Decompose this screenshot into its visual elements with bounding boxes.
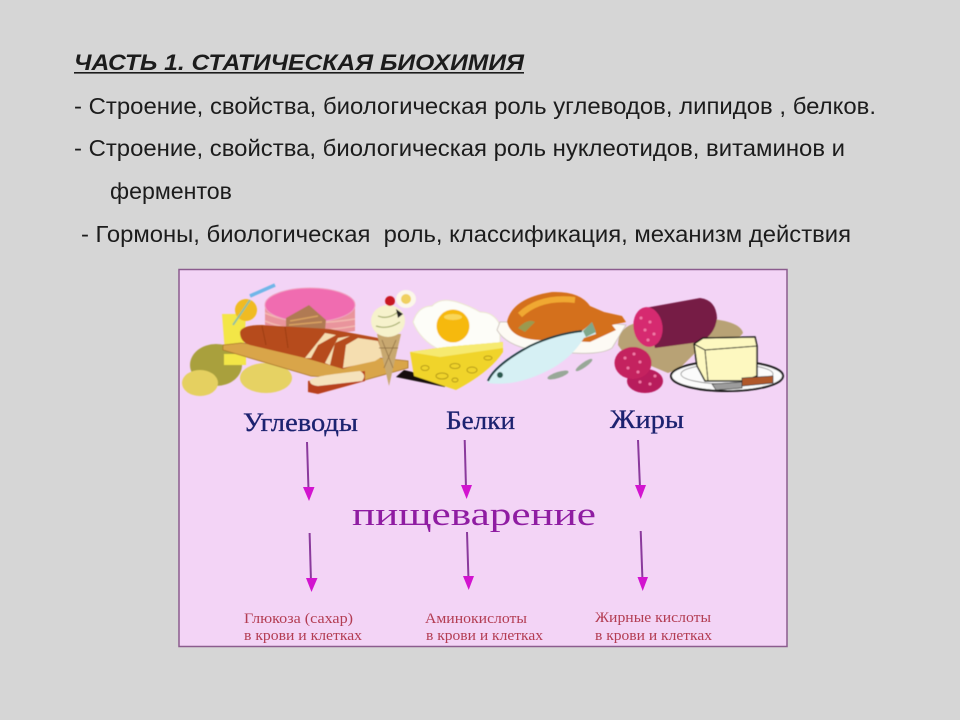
text block: syllabus items: ферментов <box>110 178 232 204</box>
icon: cutting board <box>223 343 408 380</box>
result: amino acids: Аминокислоты <box>425 611 527 627</box>
arrow: carbohydrates to digestion <box>303 442 314 501</box>
arrow: proteins to digestion <box>461 440 472 499</box>
result: fatty acids <box>595 610 713 644</box>
result: glucose: в крови и клетках <box>244 628 363 644</box>
result: glucose: Глюкоза (сахар) <box>244 611 353 627</box>
icon: cake <box>265 288 355 334</box>
icon: butter on plate with knife <box>671 337 783 391</box>
text block: syllabus items: - Строение, свойства, биологическая роль углеводов, липидов , белков. <box>74 93 876 119</box>
text block: syllabus items: - Строение, свойства, биологическая роль нуклеотидов, витаминов и <box>74 135 845 161</box>
icon: potatoes <box>182 344 292 396</box>
icon: lemonade glass <box>222 285 275 365</box>
icon: salami <box>614 298 743 393</box>
panel: digestion diagram <box>179 270 787 646</box>
heading: proteins: Белки <box>446 406 515 435</box>
icon: fried egg <box>413 300 500 350</box>
label: digestion: пищеварение <box>352 497 596 533</box>
arrow: digestion to glucose <box>306 533 318 592</box>
result: fatty acids: Жирные кислоты <box>595 610 711 626</box>
heading: fats: Жиры <box>610 405 684 434</box>
icon: bread loaf <box>240 325 384 369</box>
arrow: fats to digestion <box>635 440 646 499</box>
result: glucose <box>244 611 363 644</box>
icon: roast chicken on plate <box>497 292 626 353</box>
icon: bread slice <box>308 371 365 394</box>
heading: carbohydrates: Углеводы <box>243 408 358 437</box>
icon: ice cream cone <box>371 296 405 386</box>
food illustration <box>182 285 783 396</box>
icon: small fried egg <box>396 290 416 308</box>
arrow: digestion to amino acids <box>463 532 474 590</box>
arrow: digestion to fatty acids <box>638 531 648 591</box>
result: amino acids: в крови и клетках <box>426 628 544 644</box>
result: fatty acids: в крови и клетках <box>595 628 713 644</box>
icon: fish <box>488 322 596 384</box>
text block: syllabus items <box>74 93 876 247</box>
title: ЧАСТЬ 1. СТАТИЧЕСКАЯ БИОХИМИЯ <box>74 50 525 75</box>
icon: cheese <box>396 342 503 390</box>
text block: syllabus items: - Гормоны, биологическая роль, классификация, механизм действия <box>81 221 851 247</box>
result: amino acids <box>425 611 544 644</box>
icon: fish fins <box>547 357 594 381</box>
